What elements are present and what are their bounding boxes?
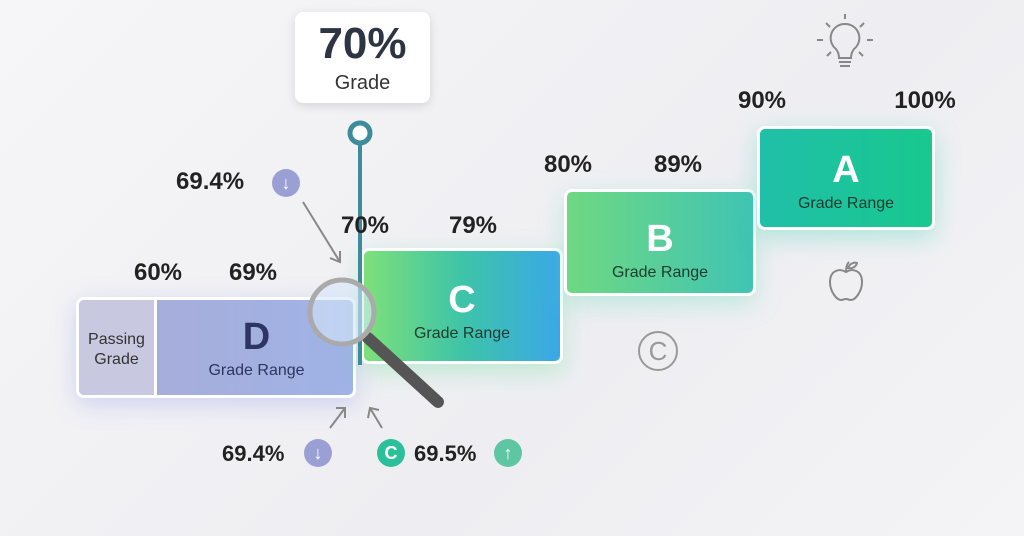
pointer line <box>348 120 372 365</box>
block B <box>564 189 756 296</box>
text: 90% <box>738 87 786 114</box>
block A: A <box>832 149 860 191</box>
callout: 70% grade: 70% <box>318 19 407 68</box>
block C: Grade Range <box>414 325 510 342</box>
annotation: C 69.5%: C <box>384 443 398 463</box>
text: 60% <box>134 259 182 286</box>
block D: Grade <box>94 351 139 368</box>
annotation: C 69.5%: 69.5% <box>414 441 476 466</box>
text: 100% <box>894 87 956 114</box>
icon: lightbulb <box>817 14 873 67</box>
annotation: bottom 69.4%: ↓ <box>314 443 322 463</box>
block D: Grade Range <box>208 362 305 379</box>
callout: 70% grade: Grade <box>335 72 390 94</box>
annotation: C 69.5% <box>377 439 522 467</box>
text: 70% <box>341 212 389 239</box>
block B: B <box>646 218 674 260</box>
block D: Passing <box>88 331 145 348</box>
icon: copyright: C <box>649 336 667 366</box>
annotation: top 69.4% <box>176 168 300 197</box>
text: 79% <box>449 212 497 239</box>
block A <box>757 126 935 230</box>
block D: D <box>243 316 270 358</box>
annotation: top 69.4%: 69.4% <box>176 168 244 195</box>
annotation: bottom 69.4%: 69.4% <box>222 441 284 466</box>
block D <box>76 297 356 398</box>
arrows <box>302 202 383 428</box>
annotation: bottom 69.4% <box>222 439 332 467</box>
annotation: top 69.4%: ↓ <box>282 173 290 193</box>
icon: copyright <box>638 331 678 371</box>
percentage labels <box>134 87 956 467</box>
icon: apple <box>829 261 863 301</box>
block B: Grade Range <box>612 264 708 281</box>
block C: C <box>448 279 476 321</box>
text: 80% <box>544 151 592 178</box>
magnifier <box>308 278 444 408</box>
text: 69% <box>229 259 277 286</box>
block C <box>361 248 563 364</box>
callout: 70% grade <box>295 12 430 103</box>
annotation: C 69.5%: ↑ <box>504 443 512 463</box>
block A: Grade Range <box>798 195 894 212</box>
text: 89% <box>654 151 702 178</box>
